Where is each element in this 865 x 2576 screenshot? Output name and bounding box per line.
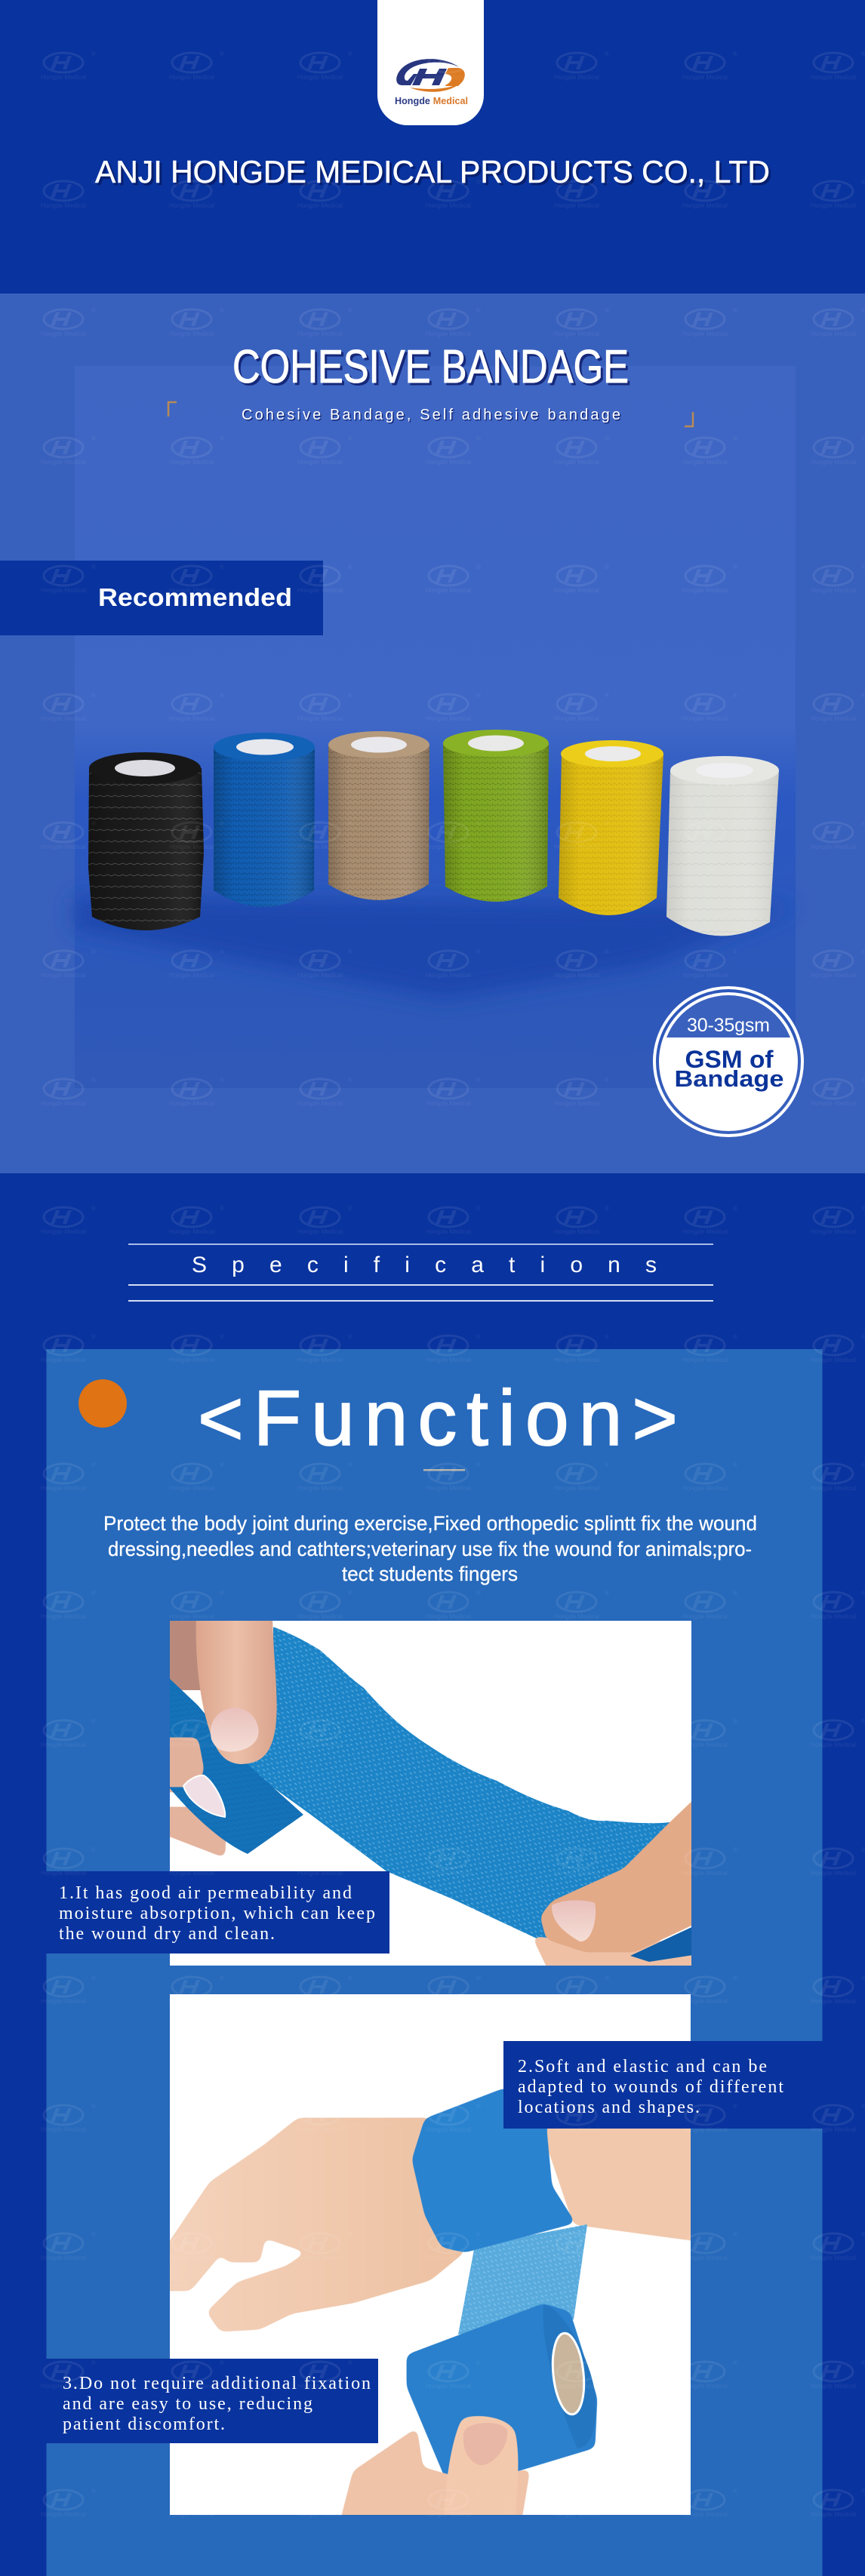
badge: GSM of bandage: 30-35gsm <box>687 1015 770 1036</box>
bandage roll: green <box>443 730 549 902</box>
bandage roll held <box>170 1679 303 1854</box>
bandage roll: white <box>666 756 779 936</box>
photo: wrist wrapped with bandage <box>162 1994 702 2524</box>
bandage strip <box>243 1627 670 1939</box>
panel: function <box>47 1349 823 2576</box>
roll side <box>543 2305 596 2448</box>
callout 2: 2.Soft and elastic and can be <box>518 2057 767 2076</box>
band under thumb <box>630 1927 691 1962</box>
left corner bracket <box>168 402 177 417</box>
thumb nail <box>463 2423 507 2465</box>
function title: <Function> <box>198 1375 678 1462</box>
photo: hands stretching bandage <box>162 1615 702 1977</box>
product title: COHESIVE BANDAGE <box>232 341 629 393</box>
inner product backdrop <box>75 366 796 1088</box>
bandage mesh strip <box>458 2224 587 2335</box>
badge: GSM of bandage: Bandage <box>675 1065 783 1092</box>
callout 3: and are easy to use, reducing <box>63 2394 312 2414</box>
roll core <box>183 1775 225 1817</box>
bandage roll: black <box>88 752 204 930</box>
icon: Hongde logo mark <box>396 59 465 92</box>
product subtitle: Cohesive Bandage, Self adhesive bandage <box>243 407 622 424</box>
floor shadow beneath rolls <box>75 898 796 1000</box>
index finger <box>196 1615 277 1764</box>
bandage roll: blue <box>214 733 315 907</box>
short rule under title <box>423 1469 465 1471</box>
hand <box>162 2118 464 2332</box>
lower finger <box>170 1737 204 1788</box>
callout 3: 3.Do not require additional fixation <box>63 2374 371 2393</box>
callout 1: 1.It has good air permeability and <box>59 1883 352 1903</box>
callout 1: moisture absorption, which can keep <box>59 1904 375 1923</box>
callout 2: adapted to wounds of different <box>518 2077 783 2097</box>
company name heading: ANJI HONGDE MEDICAL PRODUCTS CO., LTD <box>95 154 770 189</box>
roll core <box>551 2332 586 2416</box>
badge: GSM of bandage: GSM of <box>685 1046 774 1073</box>
product title: COHESIVE BANDAGE <box>235 343 631 395</box>
recommended banner: Recommended <box>98 583 292 611</box>
bandage roll: tan <box>328 731 429 900</box>
lower skin under thumb <box>534 1937 691 1966</box>
forearm <box>546 2129 691 2241</box>
logo wordmark: HongdeMedical <box>395 95 468 106</box>
callout 2: locations and shapes. <box>518 2098 700 2117</box>
callout 2 <box>503 2041 823 2129</box>
header logo tab <box>377 0 484 125</box>
callout 1: the wound dry and clean. <box>59 1924 275 1944</box>
wrist wrap <box>412 2089 575 2252</box>
function description: dressing,needles and cathters;veterinary use fix the wound for animals;pro- <box>108 1538 752 1560</box>
recommended banner <box>0 561 323 635</box>
badge: GSM of bandage <box>653 981 804 1136</box>
product subtitle: Cohesive Bandage, Self adhesive bandage <box>242 407 620 423</box>
callout 1 <box>47 1871 389 1954</box>
specifications heading: Specifications <box>192 1253 657 1277</box>
icon: orange dot <box>78 1379 127 1428</box>
function description: tect students fingers <box>342 1563 518 1585</box>
holding hand <box>341 2431 529 2515</box>
bandage roll <box>407 2304 597 2482</box>
function description: Protect the body joint during exercise,Fixed orthopedic splintt fix the wound <box>103 1512 757 1535</box>
panel: product hero <box>0 294 865 1173</box>
callout 3: patient discomfort. <box>63 2415 225 2434</box>
thumb nail <box>552 1901 596 1941</box>
right hand <box>540 1802 691 1953</box>
bandage roll: yellow <box>559 740 663 915</box>
company name heading: ANJI HONGDE MEDICAL PRODUCTS CO., LTD <box>97 156 772 192</box>
right corner bracket <box>685 412 693 426</box>
finger nail <box>211 1708 259 1752</box>
callout 3 <box>47 2359 378 2443</box>
back skin <box>170 1621 201 1690</box>
function description <box>103 1512 757 1585</box>
